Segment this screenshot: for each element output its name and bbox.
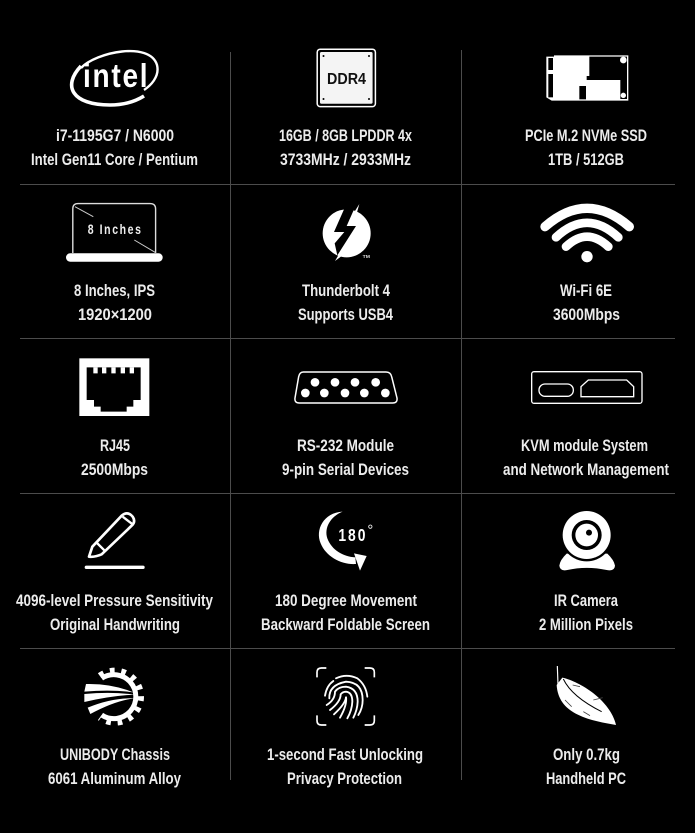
icon: KVM ports [532,372,642,403]
icon: RJ45 port [79,358,149,416]
spec text: chassis line 1: UNIBODY Chassis [60,746,170,764]
panel: hinge [261,512,430,634]
icon: thunderbolt: TM [363,254,370,259]
spec text: thunderbolt line 1: Thunderbolt 4 [302,282,391,300]
spec text: ethernet line 2: 2500Mbps [81,461,148,479]
spec text: hinge line 2: Backward Foldable Screen [261,616,430,634]
icon: wifi [545,208,629,262]
spec text: pen line 2: Original Handwriting [50,616,180,634]
icon: pencil [86,513,143,567]
spec text: ethernet line 1: RJ45 [100,437,130,455]
panel: thunderbolt [298,204,394,324]
spec text: serial line 1: RS-232 Module [297,437,394,455]
spec text: pen line 1: 4096-level Pressure Sensitivity [16,592,214,610]
panel: weight [546,666,626,788]
spec text: camera line 1: IR Camera [554,592,619,610]
spec text: thunderbolt line 2: Supports USB4 [298,306,394,324]
spec text: serial line 2: 9-pin Serial Devices [282,461,409,479]
panel: ethernet [79,358,149,479]
spec text: memory line 1: 16GB / 8GB LPDDR 4x [279,127,413,145]
icon: laptop 8 inches: 8 Inches [88,222,141,237]
spec text: camera line 2: 2 Million Pixels [539,616,633,634]
spec text: display line 2: 1920×1200 [78,306,152,324]
spec text: weight line 1: Only 0.7kg [553,746,620,764]
icon: intel logo [72,51,158,105]
panel: display [66,204,163,324]
panel: pen [16,513,214,634]
spec text: display line 1: 8 Inches, IPS [74,282,155,300]
panel: wifi [545,208,629,324]
icon: DDR4 chip: DDR4 [327,71,366,88]
spec text: memory line 2: 3733MHz / 2933MHz [280,151,411,169]
spec text: hinge line 1: 180 Degree Movement [275,592,417,610]
icon: webcam [559,509,615,570]
spec text: chassis line 2: 6061 Aluminum Alloy [48,770,182,788]
icon: intel logo: intel [83,58,148,95]
icon: M.2 SSD [546,55,628,101]
panel: memory [279,49,413,169]
panel: storage [525,55,647,169]
panel: camera [539,509,633,634]
icon: fingerprint [317,668,374,725]
spec text: wifi line 1: Wi-Fi 6E [560,282,612,300]
spec text: processor line 1: i7-1195G7 / N6000 [56,127,174,145]
icon: DB9 connector [295,372,397,403]
icon: gear with swooshes [84,671,141,723]
panel: processor [31,51,198,169]
panel: fingerprint [267,668,423,788]
spec text: unlock line 2: Privacy Protection [287,770,402,788]
spec text: storage line 1: PCIe M.2 NVMe SSD [525,127,647,145]
panel: serial port [282,372,409,479]
spec text: unlock line 1: 1-second Fast Unlocking [267,746,423,764]
spec text: weight line 2: Handheld PC [546,770,626,788]
icon: 180 degree arrow [319,512,372,571]
icon: feather [557,666,616,725]
spec text: storage line 2: 1TB / 512GB [548,151,624,169]
spec text: wifi line 2: 3600Mbps [553,306,620,324]
spec text: KVM line 1: KVM module System [521,437,648,455]
panel: KVM [503,372,669,479]
panel: chassis [48,671,182,788]
icon: 180 degree arrow: 180 [338,527,366,545]
spec text: processor line 2: Intel Gen11 Core / Pentium [31,151,198,169]
